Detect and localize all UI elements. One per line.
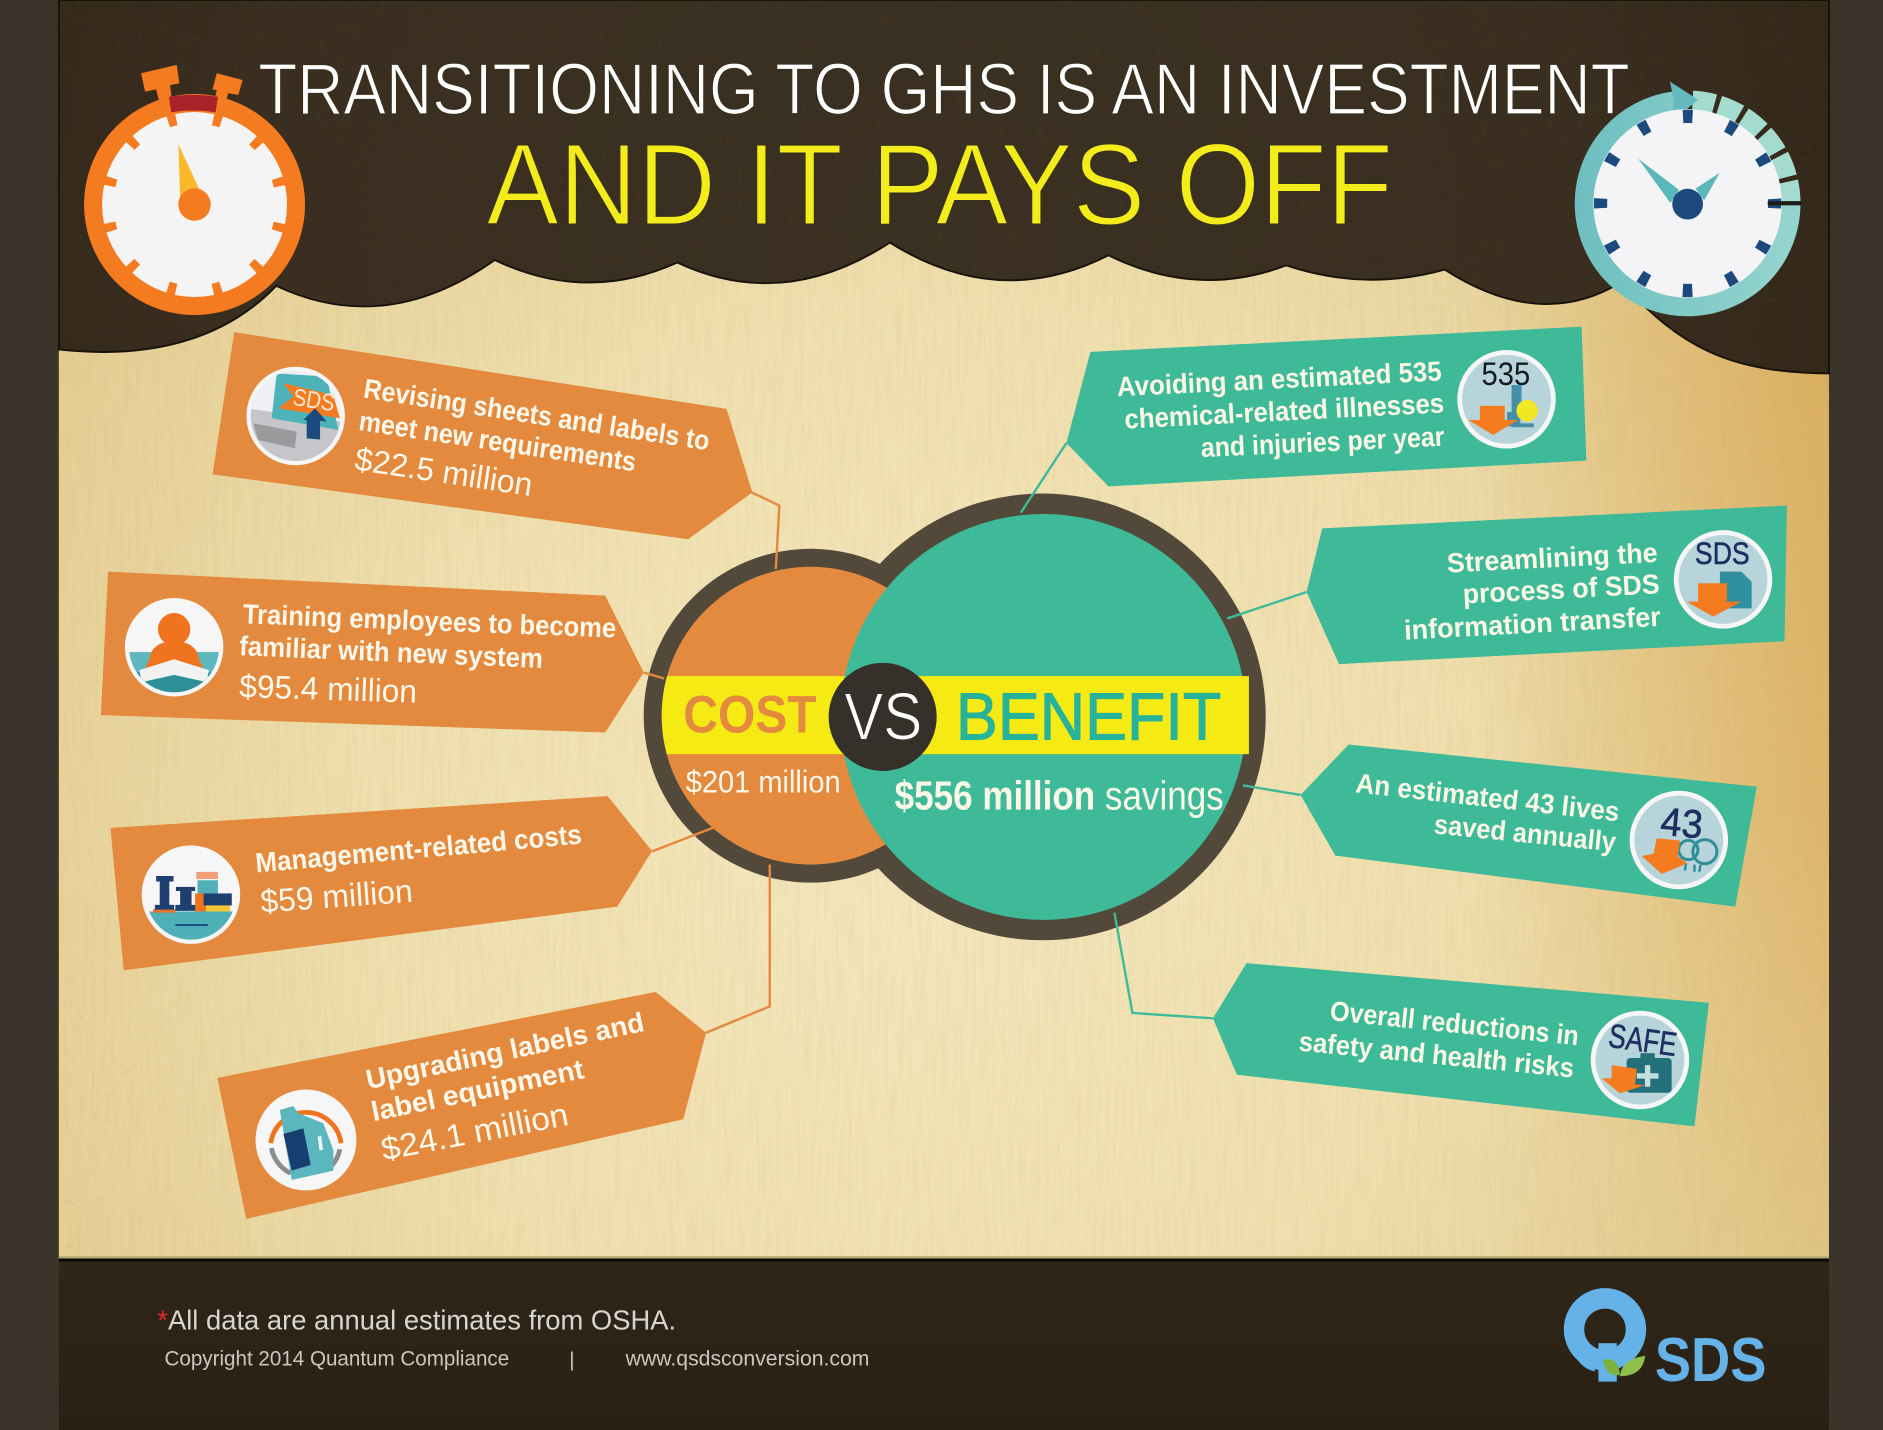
icon: label bottle: [256, 1090, 356, 1190]
badge: VS: VS: [844, 680, 922, 755]
icon: 535 microscope: 535: [1482, 356, 1530, 392]
website: www.qsdsconversion.com: [625, 1347, 869, 1370]
panel: cost item, management costs: [110, 796, 652, 970]
icon: SDS sheet upload: SDS: [291, 384, 337, 417]
text: revising sheets: $22.5 million: [353, 441, 535, 503]
icon: SDS sheet upload: [246, 366, 345, 466]
panel: benefit item, safety risks: [1213, 963, 1709, 1126]
text: lives saved: saved annually: [1433, 809, 1618, 858]
icon: clock with arrow: [1584, 82, 1801, 307]
parchment background: [59, 240, 1829, 1261]
text: upgrading labels: label equipment: [368, 1053, 586, 1127]
benefit yellow band: [889, 676, 1249, 754]
text: revising sheets: [353, 373, 712, 503]
text: avoiding illnesses: and injuries per year: [1200, 421, 1445, 463]
text: streamlining SDS: process of SDS: [1462, 568, 1660, 610]
icon: SDS document: [1674, 530, 1772, 629]
text: upgrading labels: $24.1 million: [378, 1096, 571, 1167]
footnote: *All data are annual estimates from OSHA.: [157, 1304, 676, 1335]
cost circle: [662, 567, 960, 865]
text: safety risks: [1298, 995, 1580, 1083]
logo: QSDS: SDS: [1655, 1325, 1767, 1395]
cost versus benefit circles: [644, 494, 1266, 940]
icon: reader with book: [125, 598, 223, 703]
text: safety risks: Overall reductions in: [1329, 995, 1580, 1051]
text: avoiding illnesses: chemical-related illnesses: [1124, 387, 1445, 435]
text: training employees: Training employees to become: [242, 598, 617, 644]
text: lives saved: [1354, 767, 1621, 858]
connector lines: cost: [644, 492, 779, 1033]
panel: benefit item, lives saved: [1301, 745, 1757, 907]
text: management costs: Management-related costs: [254, 819, 583, 879]
value: cost total: $201 million: [686, 765, 841, 800]
text: safety risks: safety and health risks: [1298, 1026, 1575, 1083]
title line one: TRANSITIONING TO GHS IS AN INVESTMENT: [258, 50, 1630, 130]
icon: SDS document: SDS: [1695, 536, 1750, 571]
badge: VS: [829, 663, 937, 771]
text: streamlining SDS: [1403, 537, 1662, 646]
icon: 535 microscope: [1457, 350, 1556, 449]
text: training employees: $95.4 million: [239, 668, 418, 710]
dark scalloped header: [59, 0, 1829, 384]
text: avoiding illnesses: Avoiding an estimated 535: [1116, 355, 1442, 402]
text: streamlining SDS: Streamlining the: [1446, 537, 1658, 579]
panel: benefit item, avoiding illnesses: [1066, 327, 1586, 486]
text: lives saved: An estimated 43 lives: [1354, 767, 1621, 827]
text: revising sheets: Revising sheets and labels to: [362, 373, 712, 456]
copyright line: Copyright 2014 Quantum Compliance: [165, 1347, 509, 1370]
panel: benefit item, streamlining SDS: [1307, 506, 1787, 664]
separator: |: [569, 1350, 575, 1372]
label: benefit: BENEFIT: [956, 680, 1221, 755]
panel: cost item, revising sheets: [213, 332, 752, 539]
footer band: [59, 1256, 1829, 1430]
text: training employees: familiar with new system: [239, 630, 544, 674]
text: upgrading labels: Upgrading labels and: [363, 1006, 647, 1095]
icon: 43 lungs: 43: [1659, 800, 1705, 847]
icon: 43 lungs: [1630, 791, 1728, 889]
text: revising sheets: meet new requirements: [357, 405, 638, 477]
icon: safe first aid: SAFE: [1606, 1018, 1679, 1064]
connector lines: benefit: [1021, 443, 1307, 1018]
text: training employees: [239, 598, 617, 710]
label: cost: COST: [683, 686, 817, 745]
icon: safe first aid: [1591, 1011, 1689, 1109]
icon: management bottles: [142, 845, 240, 944]
panel: cost item, upgrading labels: [217, 992, 706, 1219]
title line two: AND IT PAYS OFF: [486, 120, 1393, 250]
text: management costs: $59 million: [259, 873, 414, 920]
text: avoiding illnesses: [1116, 355, 1445, 463]
icon: stopwatch: [84, 65, 305, 315]
text: streamlining SDS: information transfer: [1403, 601, 1662, 646]
benefit circle: [841, 514, 1247, 920]
panel: cost item, training employees: [101, 572, 644, 733]
logo: QSDS: [1574, 1298, 1767, 1395]
value: benefit total: $556 million savings: [895, 772, 1224, 818]
text: upgrading labels: [363, 1006, 647, 1167]
text: management costs: [254, 819, 583, 920]
cost yellow band: [662, 676, 845, 754]
